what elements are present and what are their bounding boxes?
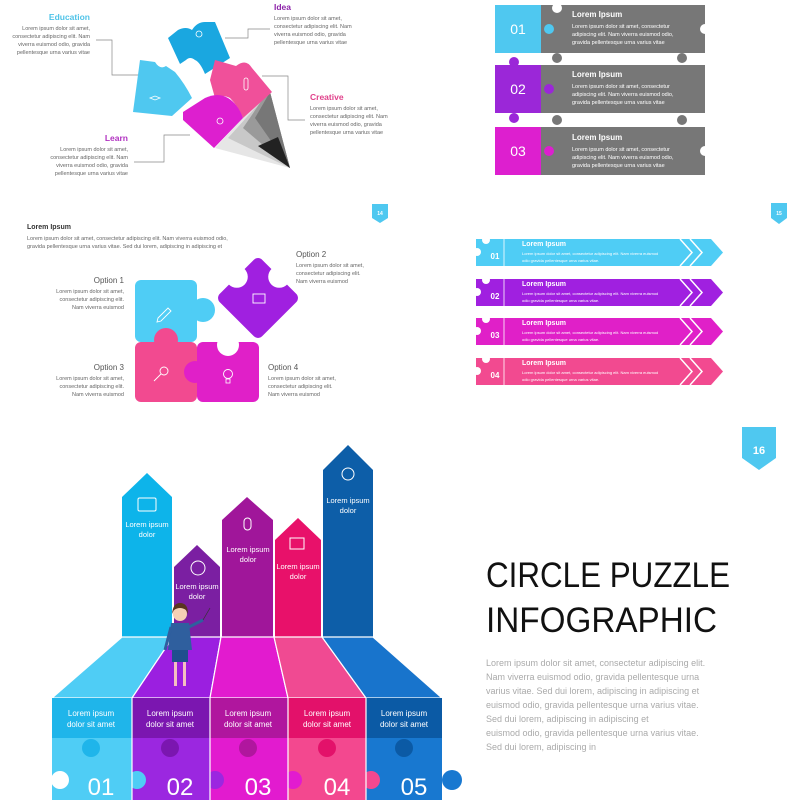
heading: Learn: pellentesque urna varius vitae [55,171,128,177]
heading: Education: consectetur adipiscing elit. Nam [12,34,90,40]
option 1 text: Lorem ipsum dolor sit amet, [56,289,124,295]
option 3 text: Nam viverra euismod [72,392,124,398]
badge: 15: 15 [776,211,782,217]
row 2: Lorem Ipsum [522,281,566,288]
label row: dolor sit amet [224,720,273,729]
row 03: Lorem ipsum dolor sit amet, consectetur [572,147,670,153]
badge: 16 [742,427,776,470]
heading: Education: Lorem ipsum dolor sit amet, [22,26,90,32]
row 02: 02 [510,81,526,97]
row 02: gravida pellentesque urna varius vitae [572,100,665,106]
connector lines [96,29,305,162]
row 02: adipiscing elit. Nam viverra euismod odio, [572,92,674,98]
arrow 2 [174,545,220,637]
row 1: odio gravida pellentesque urna varius vitae. [522,258,599,263]
option 4 text [268,363,336,398]
option 1 text: Option 1 [94,276,125,285]
heading: Creative: consectetur adipiscing elit. Nam [310,114,388,120]
puzzle: option 1 blue [135,280,215,342]
option 3 text: Lorem ipsum dolor sit amet, [56,376,124,382]
heading: Idea: consectetur adipiscing elit. Nam [274,24,352,30]
intro text [27,224,228,250]
heading: Creative: viverra euismod odio, gravida [310,122,383,128]
panel: arrow rows [473,236,723,385]
text block: description [486,658,705,752]
row 3: odio gravida pellentesque urna varius vitae. [522,337,599,342]
row 02: Lorem Ipsum [572,70,622,79]
intro text: gravida pellentesque urna varius vitae. Sed dui lorem, adipiscing in adipiscing et [27,244,223,250]
heading: Education: pellentesque urna varius vitae [17,50,90,56]
heading: Idea [274,2,352,46]
option 1 text: consectetur adipiscing elit. [59,297,124,303]
text block: description: Sed dui lorem, adipiscing in [486,742,596,752]
heading: Education: viverra euismod odio, gravida [18,42,91,48]
option 4 text: Lorem ipsum dolor sit amet, [268,376,336,382]
row 01: 01 [510,21,526,37]
row 01 [495,3,710,53]
heading: Learn: Learn [105,133,128,143]
option 2 text: Option 2 [296,250,327,259]
arrow 2: Lorem ipsum [175,582,219,591]
arrow 1: Lorem ipsum [125,520,169,529]
label row: dolor sit amet [303,720,352,729]
arrow 5 [323,445,373,637]
label row: Lorem ipsum [225,709,271,718]
heading: Learn: consectetur adipiscing elit. Nam [50,155,128,161]
row 4: Lorem ipsum dolor sit amet, consectetur adipiscing elit. Nam viverra euismod [522,370,658,375]
option 2 text: Lorem ipsum dolor sit amet, [296,263,364,269]
arrow 3: Lorem ipsum [226,545,270,554]
title: CIRCLE PUZZLE [486,556,730,595]
label row [52,698,442,738]
row 3: Lorem Ipsum [522,320,566,327]
arrow 5: dolor [340,506,357,515]
label row: dolor sit amet [380,720,429,729]
row 03: 03 [510,143,526,159]
row 03 [495,113,710,175]
puzzle piece: education (light blue) [133,60,192,116]
puzzle: option 2 purple [208,240,308,340]
row 02 [495,53,705,113]
label row: dolor sit amet [67,720,116,729]
arrow 3: dolor [240,555,257,564]
row 01: adipiscing elit. Nam viverra euismod odio, [572,32,674,38]
text block: description: varius vitae. Sed dui lorem, adipiscing in adipiscing et [486,686,700,696]
title: INFOGRAPHIC [486,601,717,640]
heading: Learn: Lorem ipsum dolor sit amet, [60,147,128,153]
icon: monitor [253,294,265,303]
label row: Lorem ipsum [147,709,193,718]
label row: Lorem ipsum [304,709,350,718]
row 4: odio gravida pellentesque urna varius vitae. [522,377,599,382]
option 4 text: Option 4 [268,363,299,372]
panel: numbered gray puzzle rows [495,3,710,175]
heading: Idea: viverra euismod odio, gravida [274,32,347,38]
option 3 text: Option 3 [94,363,125,372]
row 03: gravida pellentesque urna varius vitae [572,163,665,169]
puzzle piece: idea (blue) [168,22,230,74]
row 4: Lorem Ipsum [522,360,566,367]
chart: arrow columns with puzzle floor [51,445,462,800]
pencil body stripes [215,92,290,168]
puzzle: option 3 pink [135,328,197,402]
option 2 text: consectetur adipiscing elit. [296,271,361,277]
row 2 [473,276,723,306]
row 1: Lorem ipsum dolor sit amet, consectetur adipiscing elit. Nam viverra euismod [522,251,658,256]
option 2 text: Nam viverra euismod [296,279,348,285]
puzzle number row [51,698,462,800]
text block: description: euismod odio, gravida pellentesque urna varius vitae. [486,728,699,738]
badge: 16: 16 [753,445,765,457]
arrow 4: dolor [290,572,307,581]
label row: Lorem ipsum [68,709,114,718]
puzzle piece: learn (magenta) [183,95,243,148]
option 2 text [296,250,364,285]
row 2: odio gravida pellentesque urna varius vitae. [522,298,599,303]
puzzle piece: creative (pink) [210,60,272,118]
row 03: Lorem Ipsum [572,133,622,142]
row 02: Lorem ipsum dolor sit amet, consectetur [572,84,670,90]
heading: Idea: Idea [274,2,291,12]
row 01: Lorem ipsum dolor sit amet, consectetur [572,24,670,30]
option 4 text: Nam viverra euismod [268,392,320,398]
row 3 [473,315,723,345]
arrow 3 [222,497,273,637]
heading: Learn: viverra euismod odio, gravida [56,163,129,169]
text block: description: Sed dui lorem, adipiscing in adipiscing et [486,714,649,724]
intro text: Lorem ipsum dolor sit amet, consectetur adipiscing elit. Nam viverra euismod odio, [27,236,228,242]
row 3: Lorem ipsum dolor sit amet, consectetur adipiscing elit. Nam viverra euismod [522,330,658,335]
arrow 1: dolor [139,530,156,539]
intro text: Lorem Ipsum [27,224,71,231]
row 1: Lorem Ipsum [522,241,566,248]
row 03: adipiscing elit. Nam viverra euismod odio, [572,155,674,161]
puzzle: option 4 magenta [184,334,259,402]
arrow 4: Lorem ipsum [276,562,320,571]
arrow 2: dolor [189,592,206,601]
badge: 14: 14 [377,211,383,217]
option 1 text [56,276,125,311]
label row: dolor sit amet [146,720,195,729]
heading: Education [12,12,91,56]
row 1: 01 [491,252,500,261]
row 3: 03 [491,331,500,340]
option 1 text: Nam viverra euismod [72,305,124,311]
figure: presenter woman [165,603,210,686]
heading: Idea: pellentesque urna varius vitae [274,40,347,46]
heading: Creative: Lorem ipsum dolor sit amet, [310,106,378,112]
heading: Creative [310,92,388,136]
option 3 text: consectetur adipiscing elit. [59,384,124,390]
badge: 15 [771,203,787,224]
row 2: 02 [491,292,500,301]
arrow 4 [275,518,321,637]
label row: Lorem ipsum [381,709,427,718]
title [486,556,730,640]
panel: four option puzzle [27,224,364,402]
floor [52,637,442,698]
arrow 1 [122,473,172,637]
text block: description: euismod odio, gravida pellentesque urna varius vitae. [486,700,699,710]
row 4 [473,355,723,385]
row 01: gravida pellentesque urna varius vitae [572,40,665,46]
text block: description: Lorem ipsum dolor sit amet, consectetur adipiscing elit. [486,658,705,668]
text block: description: Nam viverra euismod odio, gravida pellentesque urna [486,672,699,682]
badge: 14 [372,204,388,223]
row 4: 04 [491,371,500,380]
heading: Creative: pellentesque urna varius vitae [310,130,383,136]
option 3 text [56,363,125,398]
heading: Creative: Creative [310,92,344,102]
row 01: Lorem Ipsum [572,10,622,19]
panel: pencil puzzle [12,2,388,177]
option 4 text: consectetur adipiscing elit. [268,384,333,390]
heading: Idea: Lorem ipsum dolor sit amet, [274,16,342,22]
row 1 [473,236,723,266]
row 2: Lorem ipsum dolor sit amet, consectetur adipiscing elit. Nam viverra euismod [522,291,658,296]
heading: Learn [50,133,129,177]
arrow 5: Lorem ipsum [326,496,370,505]
heading: Education: Education [49,12,90,22]
